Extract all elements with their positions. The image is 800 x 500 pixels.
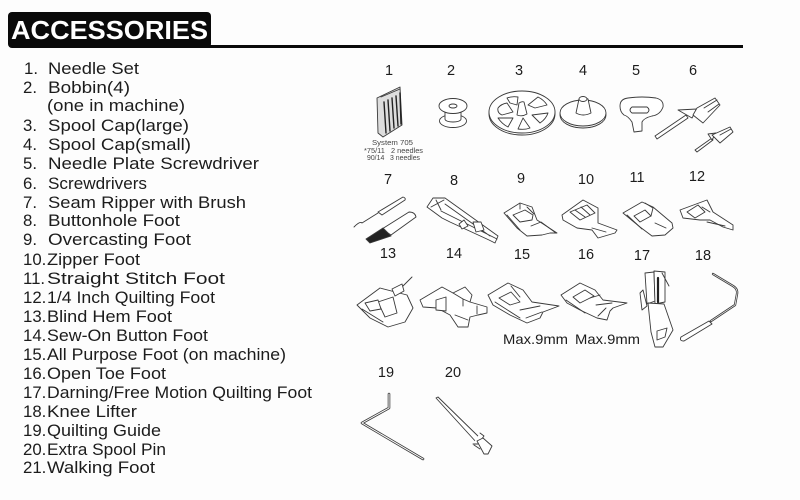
accessories list: 3. bbox=[23, 116, 37, 135]
accessories list: 16. bbox=[23, 364, 46, 383]
item numbers: 7 bbox=[384, 172, 392, 188]
accessories list: 18. bbox=[23, 402, 46, 421]
accessories list: Needle Plate Screwdriver bbox=[48, 154, 259, 173]
accessories list: 8. bbox=[23, 211, 37, 230]
accessories list: Spool Cap(small) bbox=[48, 135, 191, 154]
accessories list: 14. bbox=[23, 326, 46, 345]
icon: bobbin bbox=[439, 98, 467, 128]
needle set caption: System 705 bbox=[372, 138, 413, 147]
accessories list: Quilting Guide bbox=[47, 421, 161, 440]
icon: small spool cap bbox=[560, 96, 606, 128]
accessories list: Sew-On Button Foot bbox=[47, 326, 208, 345]
accessories list: 20. bbox=[23, 440, 46, 459]
accessories list: Seam Ripper with Brush bbox=[48, 193, 246, 212]
icon: open toe foot bbox=[561, 283, 627, 320]
needle set caption bbox=[364, 138, 423, 162]
item numbers bbox=[378, 63, 711, 381]
item numbers: 13 bbox=[380, 246, 396, 262]
icon: sew-on button foot bbox=[420, 287, 487, 327]
accessories list: 1/4 Inch Quilting Foot bbox=[47, 288, 215, 307]
icon: screwdrivers bbox=[655, 98, 733, 152]
item numbers: 8 bbox=[450, 173, 458, 189]
item numbers: 5 bbox=[632, 63, 640, 79]
accessories list: 6. bbox=[23, 174, 37, 193]
accessories list: Straight Stitch Foot bbox=[47, 269, 225, 288]
accessories list: 11. bbox=[23, 269, 45, 288]
accessories list: (one in machine) bbox=[47, 96, 185, 115]
foot size captions bbox=[503, 331, 640, 347]
accessories list: Spool Cap(large) bbox=[48, 116, 189, 135]
accessories list: 10. bbox=[23, 250, 46, 269]
foot size captions: Max.9mm bbox=[503, 331, 568, 347]
icon: quilting guide bbox=[362, 394, 423, 459]
accessories list: Walking Foot bbox=[47, 458, 155, 477]
needle set caption: 90/14 3 needles bbox=[367, 153, 420, 162]
accessories list bbox=[23, 59, 312, 477]
accessories list: Darning/Free Motion Quilting Foot bbox=[47, 383, 312, 402]
item numbers: 19 bbox=[378, 365, 394, 381]
icon: straight stitch foot bbox=[623, 202, 673, 236]
icon: needle plate screwdriver bbox=[620, 97, 663, 132]
accessories list: 2. bbox=[23, 78, 37, 97]
item numbers: 17 bbox=[634, 248, 650, 264]
accessories list: 4. bbox=[23, 135, 37, 154]
icon: zipper foot bbox=[562, 200, 617, 238]
accessories list: Zipper Foot bbox=[47, 250, 140, 269]
icon: blind hem foot bbox=[357, 277, 413, 327]
accessories list: 7. bbox=[23, 193, 37, 212]
accessories list: Overcasting Foot bbox=[48, 230, 191, 249]
accessories list: Needle Set bbox=[48, 59, 139, 78]
accessories list: 1. bbox=[24, 59, 38, 78]
accessories list: Blind Hem Foot bbox=[47, 307, 172, 326]
accessories list: 19. bbox=[23, 421, 46, 440]
accessories list: Buttonhole Foot bbox=[48, 211, 180, 230]
item numbers: 10 bbox=[578, 172, 594, 188]
icon: seam ripper with brush bbox=[354, 197, 416, 243]
item numbers: 18 bbox=[695, 248, 711, 264]
item numbers: 12 bbox=[689, 169, 705, 185]
icon: needle set bbox=[377, 87, 402, 137]
accessories list: Screwdrivers bbox=[48, 174, 147, 193]
icon: overcasting foot bbox=[504, 203, 557, 236]
item numbers: 1 bbox=[385, 63, 393, 79]
item numbers: 15 bbox=[514, 247, 530, 263]
accessories list: Knee Lifter bbox=[47, 402, 137, 421]
item numbers: 6 bbox=[689, 63, 697, 79]
icon: knee lifter bbox=[680, 274, 737, 341]
icon: large spool cap bbox=[489, 91, 555, 135]
needle set caption: *75/11 2 needles bbox=[364, 146, 423, 155]
foot size captions: Max.9mm bbox=[575, 331, 640, 347]
accessories list: Open Toe Foot bbox=[47, 364, 166, 383]
accessories list: All Purpose Foot (on machine) bbox=[47, 345, 286, 364]
accessories list: 15. bbox=[23, 345, 46, 364]
icon: extra spool pin bbox=[436, 397, 492, 454]
icon: darning foot bbox=[640, 271, 673, 347]
item numbers: 4 bbox=[579, 63, 587, 79]
item numbers: 11 bbox=[629, 170, 645, 186]
item numbers: 20 bbox=[445, 365, 461, 381]
icon: all purpose foot bbox=[488, 283, 559, 323]
item numbers: 16 bbox=[578, 247, 594, 263]
title bbox=[8, 12, 743, 48]
accessories list: 13. bbox=[23, 307, 46, 326]
icon: quilting foot bbox=[680, 200, 733, 230]
accessories list: Bobbin(4) bbox=[48, 78, 130, 97]
item numbers: 14 bbox=[446, 246, 462, 262]
item numbers: 2 bbox=[447, 63, 455, 79]
item numbers: 9 bbox=[517, 171, 525, 187]
accessories list: 12. bbox=[23, 288, 46, 307]
title: ACCESSORIES bbox=[11, 17, 208, 45]
accessories list: Extra Spool Pin bbox=[47, 440, 166, 459]
accessories list: 21. bbox=[23, 458, 46, 477]
accessories list: 9. bbox=[23, 230, 37, 249]
accessories list: 5. bbox=[23, 154, 37, 173]
icon: buttonhole foot bbox=[427, 198, 498, 243]
item numbers: 3 bbox=[515, 63, 523, 79]
accessories list: 17. bbox=[23, 383, 46, 402]
